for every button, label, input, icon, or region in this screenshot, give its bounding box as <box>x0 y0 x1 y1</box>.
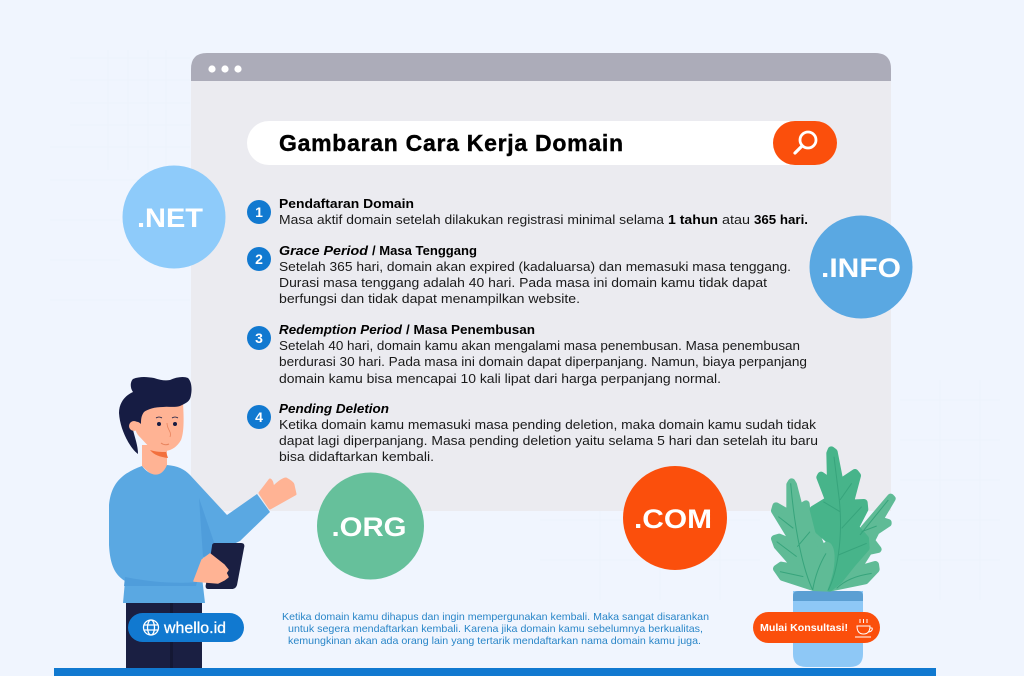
footer bar <box>54 668 936 676</box>
footer note: Ketika domain kamu dihapus dan ingin mempergunakan kembali. Maka sangat disarankan <box>282 611 709 623</box>
step 3 heading <box>279 322 535 337</box>
hair <box>119 377 192 454</box>
legs <box>126 600 202 668</box>
step 4 body: Ketika domain kamu memasuki masa pending deletion, maka domain kamu sudah tidak <box>279 417 817 432</box>
illustration: plant <box>775 450 892 667</box>
step 3 body: berdurasi 30 hari. Pada masa ini domain dapat diperpanjang. Namun, biaya perpanjang <box>279 354 807 369</box>
icon: number 1: 1 <box>255 204 263 220</box>
badge: .COM: .COM <box>634 504 712 534</box>
step 3 heading: / Masa Penembusan <box>406 322 535 337</box>
step 3 heading: Redemption Period <box>279 322 403 337</box>
footer note: kemungkinan akan ada orang lain yang tertarik mendaftarkan nama domain kamu juga. <box>288 635 701 647</box>
step 4 body: dapat lagi diperpanjang. Masa pending deletion yaitu selama 5 hari dan setelah itu baru <box>279 433 818 448</box>
step 1 body: 1 tahun <box>668 212 718 227</box>
step 3 body: Setelah 40 hari, domain kamu akan mengalami masa penembusan. Masa penembusan <box>279 338 800 353</box>
step 4 body: bisa didaftarkan kembali. <box>279 449 434 464</box>
neck <box>142 445 167 479</box>
footer note: untuk segera mendaftarkan kembali. Karena jika domain kamu sebelumnya berkualitas, <box>288 623 703 635</box>
front lobe <box>812 542 835 591</box>
step 2 heading <box>279 243 477 258</box>
icon: number 3: 3 <box>255 330 263 346</box>
right leaf <box>829 497 892 588</box>
step 4 heading: Pending Deletion <box>279 401 389 416</box>
sweater <box>109 465 270 603</box>
step 4 <box>247 401 818 464</box>
step 1 body: atau <box>722 212 750 227</box>
step 4 body <box>279 417 818 464</box>
step 2 body: Setelah 365 hari, domain akan expired (kadaluarsa) dan memasuki masa tenggang. <box>279 259 791 274</box>
title: Gambaran Cara Kerja Domain <box>279 130 623 156</box>
step 1 body: 365 hari. <box>754 212 808 227</box>
step 2 body <box>279 259 791 306</box>
step 2 body: berfungsi dan tidak dapat menampilkan website. <box>279 291 580 306</box>
face details <box>156 417 178 445</box>
sweater shading <box>124 577 197 586</box>
step 1 <box>247 196 808 227</box>
left hand <box>194 554 228 583</box>
badge: .INFO <box>810 216 912 318</box>
step 2 heading: Grace Period <box>279 243 369 258</box>
icon: globe <box>144 620 158 635</box>
button: whello.id: whello.id <box>163 620 226 637</box>
illustration: person <box>109 377 295 668</box>
center leaf <box>813 450 866 588</box>
icon: number 1 <box>247 200 271 224</box>
icon: coffee cup <box>855 619 872 637</box>
search bar <box>247 121 837 165</box>
foliage <box>775 450 892 591</box>
step 2 body: Durasi masa tenggang adalah 40 hari. Pada masa ini domain kamu tidak dapat <box>279 275 767 290</box>
veins <box>777 457 888 590</box>
button: Mulai Konsultasi: Mulai Konsultasi! <box>760 622 848 634</box>
icon: window dots <box>208 65 242 73</box>
button: Mulai Konsultasi <box>753 612 880 643</box>
step 1 heading: Pendaftaran Domain <box>279 196 414 211</box>
icon: number 2: 2 <box>255 251 263 267</box>
left leaf <box>775 482 827 588</box>
badge: .ORG: .ORG <box>332 512 406 542</box>
pot <box>793 591 863 667</box>
head <box>135 403 184 451</box>
button: whello.id <box>128 613 244 642</box>
raised hand <box>260 479 295 508</box>
icon: number 4: 4 <box>255 409 263 425</box>
footer note <box>282 611 709 647</box>
neck shadow <box>150 450 168 458</box>
badge: .ORG <box>317 472 424 580</box>
tablet <box>206 543 244 589</box>
badge: .NET: .NET <box>137 203 204 233</box>
badge: .COM <box>623 466 727 570</box>
step 3 <box>247 322 807 386</box>
step 3 body: domain kamu bisa mencapai 10 kali lipat dari harga perpanjang normal. <box>279 371 721 386</box>
step 2 <box>247 243 791 306</box>
step 1 body: Masa aktif domain setelah dilakukan registrasi minimal selama <box>279 212 665 227</box>
badge: .NET <box>122 166 226 268</box>
icon: number 4 <box>247 405 271 429</box>
icon: number 2 <box>247 247 271 271</box>
step 2 heading: / Masa Tenggang <box>372 243 477 258</box>
panel: browser window <box>191 53 891 511</box>
ear <box>129 421 139 431</box>
step 3 body <box>279 338 807 386</box>
step 1 body <box>279 212 808 227</box>
icon: number 3 <box>247 326 271 350</box>
icon: search button <box>773 121 837 165</box>
badge: .INFO: .INFO <box>821 253 901 283</box>
